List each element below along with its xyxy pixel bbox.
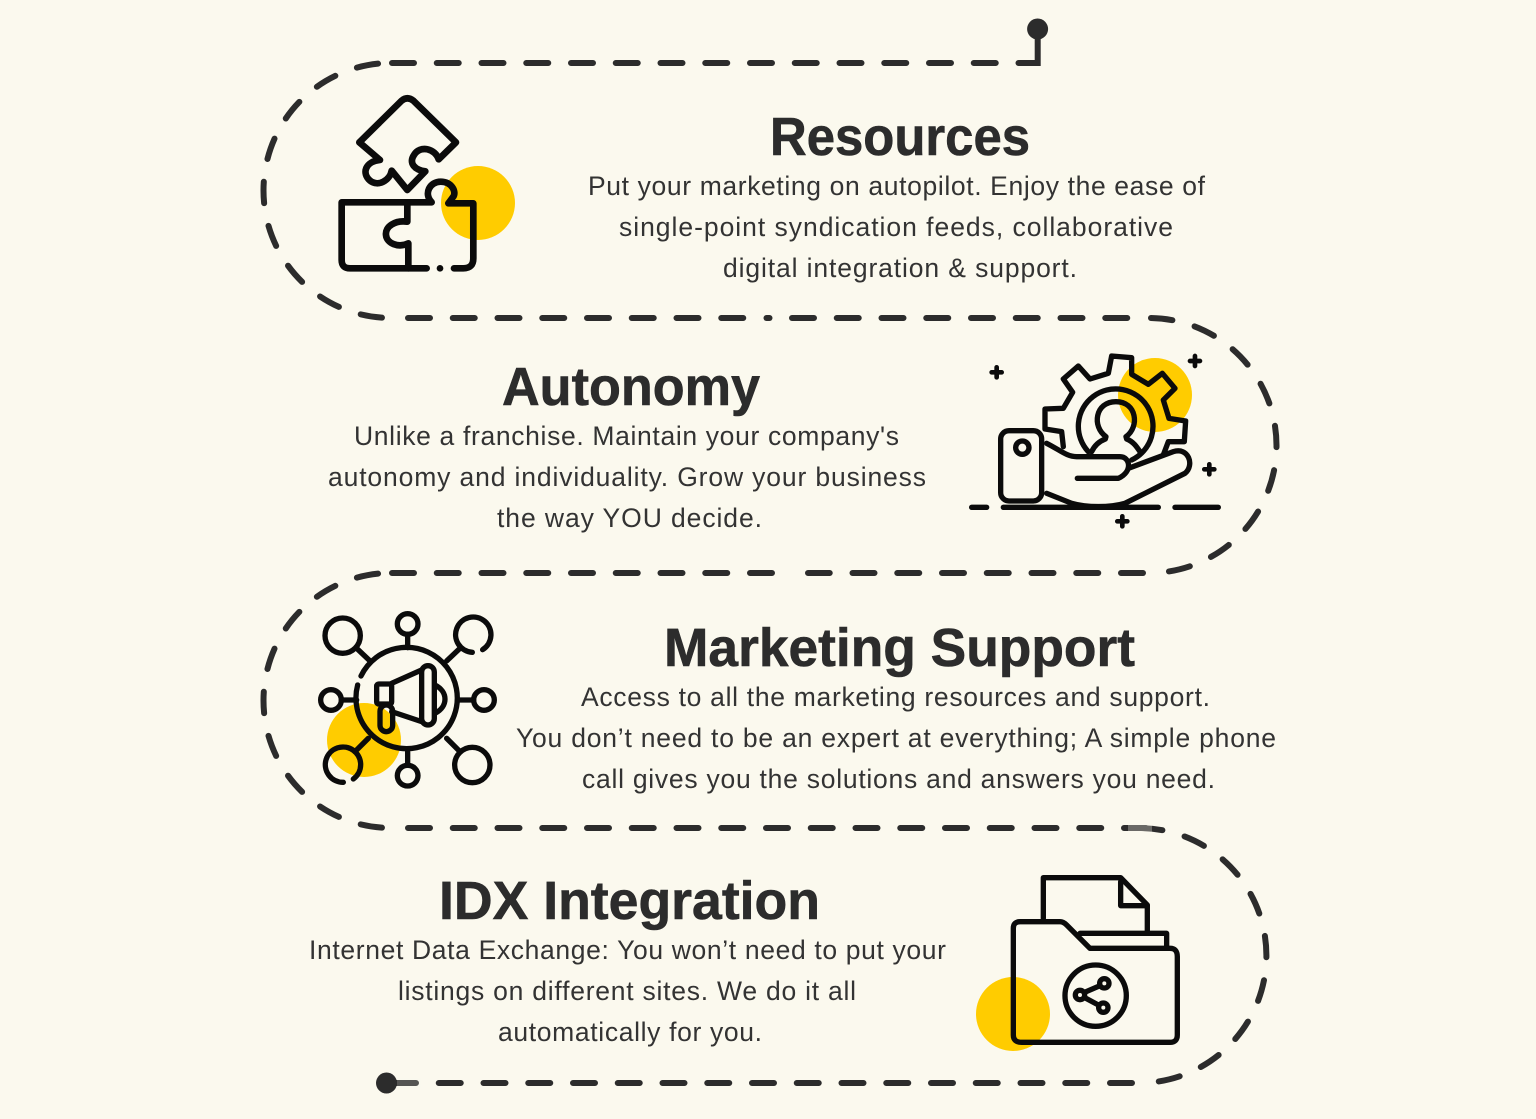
- heading: resources: Resources: [770, 107, 1030, 167]
- text block: marketing support description: [516, 682, 1276, 794]
- text block: autonomy description: the way YOU decide.: [497, 503, 762, 533]
- text block: marketing support description: Access to all the marketing resources and support.: [581, 682, 1210, 712]
- panel: autonomy: [328, 356, 1218, 533]
- text block: resources description: Put your marketing on autopilot. Enjoy the ease of: [588, 171, 1206, 201]
- text block: idx integration description: Internet Data Exchange: You won’t need to put your: [309, 935, 946, 965]
- text block: idx integration description: [309, 935, 946, 1047]
- text block: resources description: single-point syndication feeds, collaborative: [619, 212, 1173, 242]
- text block: resources description: digital integration & support.: [723, 253, 1077, 283]
- text block: idx integration description: automatically for you.: [498, 1017, 762, 1047]
- icon: hand holding gear: [972, 356, 1218, 526]
- panel: marketing support: [321, 614, 1276, 794]
- panel: idx integration: [309, 871, 1177, 1051]
- text block: idx integration description: listings on different sites. We do it all: [398, 976, 856, 1006]
- text block: resources description: [588, 171, 1206, 283]
- text block: marketing support description: call gives you the solutions and answers you need.: [582, 764, 1215, 794]
- panel: resources: [342, 98, 1206, 283]
- text block: autonomy description: [328, 421, 926, 533]
- text block: autonomy description: Unlike a franchise. Maintain your company's: [354, 421, 899, 451]
- dashed route path: [264, 18, 1277, 1094]
- icon: megaphone network: [321, 614, 494, 786]
- text block: marketing support description: You don’t need to be an expert at everything; A simple phone: [516, 723, 1276, 753]
- heading: autonomy: Autonomy: [502, 357, 760, 417]
- text block: autonomy description: autonomy and individuality. Grow your business: [328, 462, 926, 492]
- icon: puzzle pieces: [342, 98, 515, 268]
- icon: folder with shared document: [976, 878, 1177, 1051]
- heading: idx integration: IDX Integration: [439, 871, 820, 931]
- heading: marketing support: Marketing Support: [664, 618, 1135, 678]
